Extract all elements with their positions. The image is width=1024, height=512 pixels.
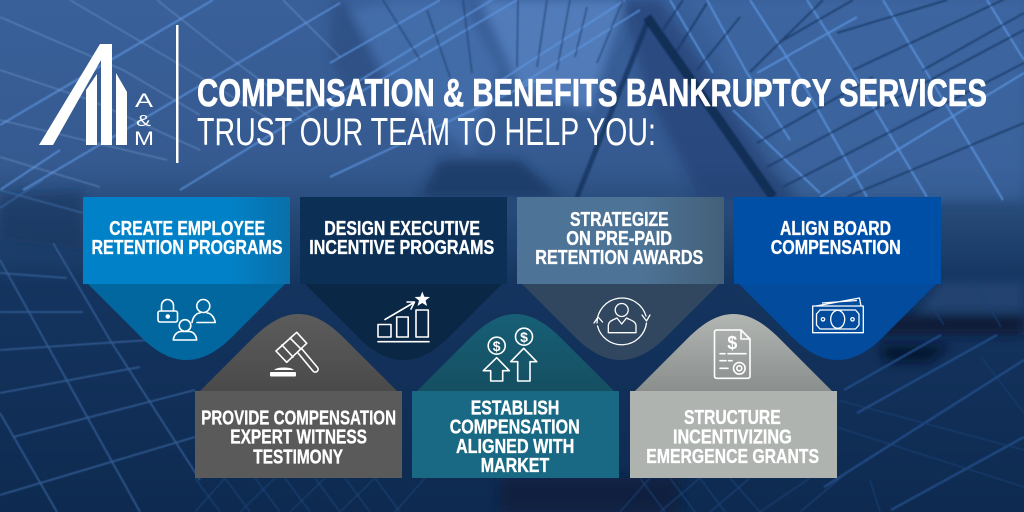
panel: design executive incentive programs: DESIGN EXECUTIVE — [324, 218, 480, 240]
panel: provide compensation expert witness testimony: TESTIMONY — [253, 446, 344, 468]
icon: growth chart with star — [378, 292, 430, 342]
panel: strategize on pre-paid retention awards: RETENTION AWARDS — [535, 247, 703, 269]
logo: A&M: & — [136, 113, 151, 130]
panel: provide compensation expert witness testimony: PROVIDE COMPENSATION — [201, 407, 396, 429]
panel: create employee retention programs — [83, 197, 290, 360]
panel: create employee retention programs: RETENTION PROGRAMS — [92, 237, 282, 259]
panel: provide compensation expert witness testimony — [195, 314, 402, 478]
icon: person in cycle — [594, 298, 650, 345]
panel: align board compensation: COMPENSATION — [771, 237, 901, 259]
panel: establish compensation aligned with market: ALIGNED WITH — [456, 436, 574, 458]
panel: establish compensation aligned with market: ESTABLISH — [471, 397, 559, 419]
panel: align board compensation — [734, 197, 941, 360]
panel: design executive incentive programs — [300, 197, 507, 360]
subtitle: TRUST OUR TEAM TO HELP YOU: — [197, 111, 656, 154]
panel: strategize on pre-paid retention awards: ON PRE-PAID — [566, 228, 672, 250]
icon: dollars and up arrows: $ — [493, 338, 501, 354]
top centre thin dark mullions — [383, 0, 623, 77]
panel: create employee retention programs: CREATE EMPLOYEE — [109, 218, 265, 240]
panel: structure incentivizing emergence grants: INCENTIVIZING — [673, 426, 792, 448]
logo: A&M: M — [134, 129, 154, 150]
icon: grant document: $ — [727, 333, 737, 353]
panel: structure incentivizing emergence grants: EMERGENCE GRANTS — [646, 446, 819, 468]
left lower lines — [0, 180, 200, 512]
divider — [176, 25, 178, 163]
upper left lines: descending — [0, 0, 340, 187]
right lower lines — [824, 335, 1024, 510]
icon: grant document — [714, 330, 750, 378]
logo: A&M: A — [135, 91, 153, 112]
icon: gavel — [270, 332, 318, 376]
panel: provide compensation expert witness testimony: EXPERT WITNESS — [230, 427, 367, 449]
panel: structure incentivizing emergence grants — [630, 314, 837, 478]
panel: strategize on pre-paid retention awards — [517, 197, 724, 360]
panel: establish compensation aligned with market — [412, 314, 619, 478]
panel: design executive incentive programs: INCENTIVE PROGRAMS — [309, 237, 494, 259]
panel: establish compensation aligned with market: COMPENSATION — [450, 416, 580, 438]
upper right lines: rising dark — [663, 0, 1024, 197]
bottom strip lattice — [195, 470, 850, 512]
panel: strategize on pre-paid retention awards: STRATEGIZE — [570, 209, 669, 231]
panel: establish compensation aligned with market: MARKET — [481, 455, 549, 477]
icon: lock and people — [158, 300, 215, 340]
icon: dollars and up arrows — [483, 328, 537, 381]
upper left lines: rising — [0, 0, 640, 190]
logo: A&M — [39, 44, 154, 150]
icon: dollars and up arrows: $ — [520, 329, 528, 345]
panel: structure incentivizing emergence grants: STRUCTURE — [684, 407, 781, 429]
upper right lines: descending light — [670, 0, 1024, 200]
panel: align board compensation: ALIGN BOARD — [780, 218, 891, 240]
icon: banknotes — [813, 298, 863, 333]
